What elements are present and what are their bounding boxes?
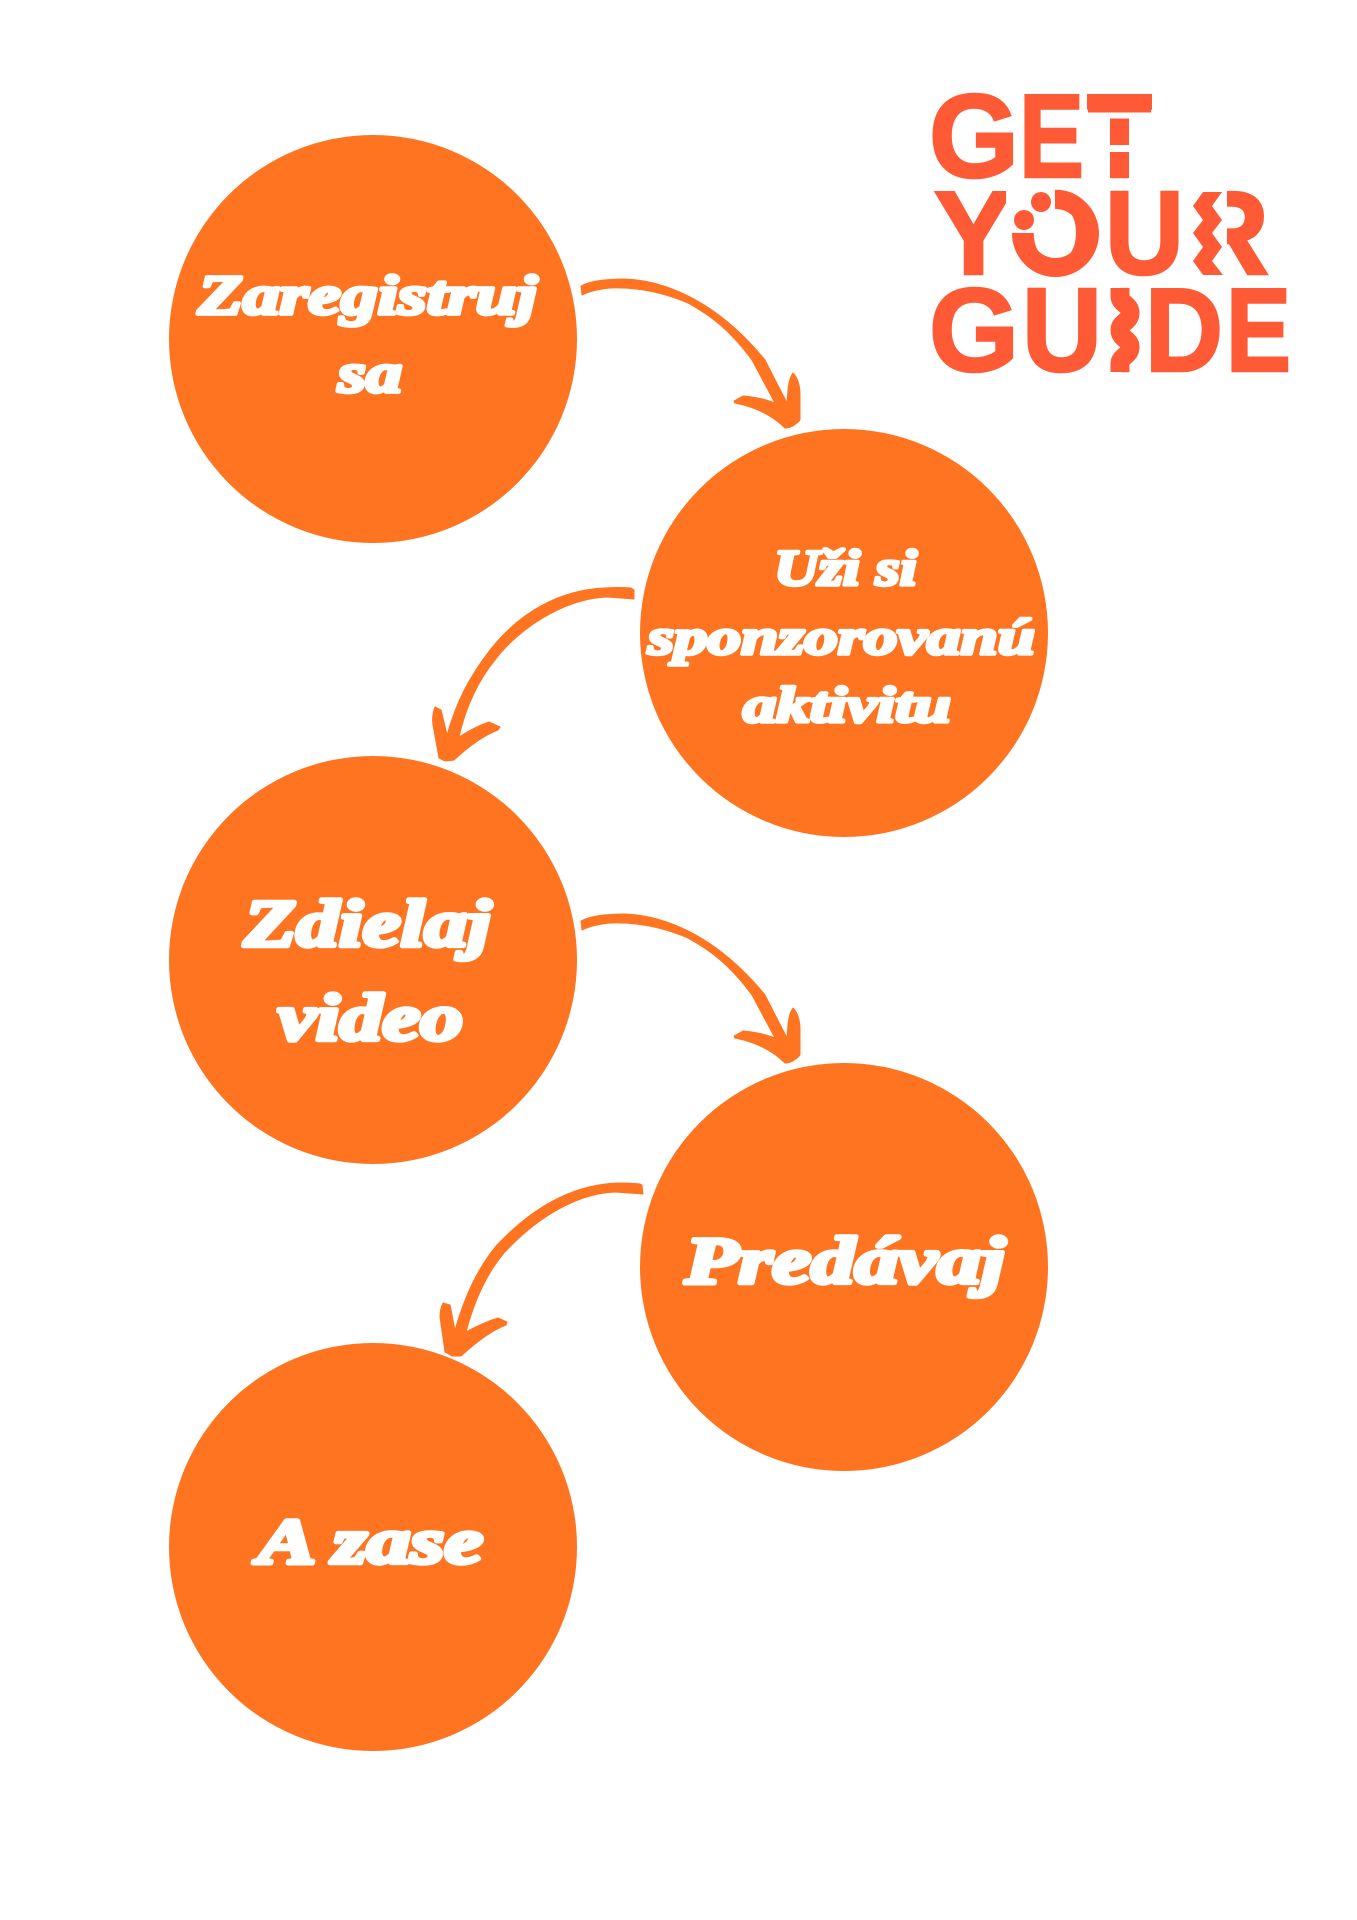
logo line: YOUR: Y bbox=[934, 167, 1013, 300]
logo line: GUIDE: D bbox=[1145, 264, 1223, 397]
arrow: step 2 to step 3 bbox=[433, 588, 634, 761]
logo line: GUIDE: G bbox=[929, 264, 1019, 397]
logo line: YOUR: U bbox=[1105, 167, 1184, 300]
logo line: YOUR bbox=[934, 167, 1269, 300]
step 5: A zase: A zase bbox=[253, 1506, 483, 1578]
logo line: GET: E bbox=[1019, 70, 1084, 203]
arrow: step 4 to step 5 bbox=[440, 1183, 643, 1356]
step 3: Zdielaj video: Zdielaj bbox=[243, 887, 491, 961]
logo line: YOUR: O bbox=[1012, 167, 1098, 300]
arrow: step 3 to step 4 bbox=[581, 914, 800, 1063]
logo line: GUIDE: I bbox=[1118, 264, 1132, 397]
step 2: Uži si sponzorovanú aktivitu: aktivitu bbox=[743, 678, 951, 734]
step 4: Predávaj bbox=[640, 1063, 1048, 1471]
step 1: Zaregistruj sa: Zaregistruj bbox=[197, 265, 538, 327]
logo line: GET: G bbox=[929, 70, 1019, 203]
logo line: GUIDE bbox=[929, 264, 1291, 397]
step 2: Uži si sponzorovanú aktivitu bbox=[640, 429, 1048, 837]
step 1: Zaregistruj sa bbox=[169, 135, 577, 543]
step 2: Uži si sponzorovanú aktivitu: sponzorovanú bbox=[647, 610, 1035, 666]
logo: Get Your Guide bbox=[929, 70, 1291, 397]
step 2: Uži si sponzorovanú aktivitu: Uži si bbox=[774, 541, 917, 597]
step 4: Predávaj: Predávaj bbox=[684, 1224, 1005, 1298]
step 1: Zaregistruj sa: sa bbox=[337, 343, 402, 405]
logo line: GUIDE: E bbox=[1226, 264, 1291, 397]
step 3: Zdielaj video: video bbox=[278, 981, 463, 1055]
step 3: Zdielaj video bbox=[169, 756, 577, 1164]
step 5: A zase bbox=[169, 1343, 577, 1751]
logo line: GET: T bbox=[1087, 70, 1152, 203]
logo line: GUIDE: U bbox=[1022, 264, 1102, 397]
logo line: GET bbox=[929, 70, 1152, 203]
logo line: YOUR: R bbox=[1186, 167, 1269, 300]
arrow: step 1 to step 2 bbox=[581, 279, 800, 428]
